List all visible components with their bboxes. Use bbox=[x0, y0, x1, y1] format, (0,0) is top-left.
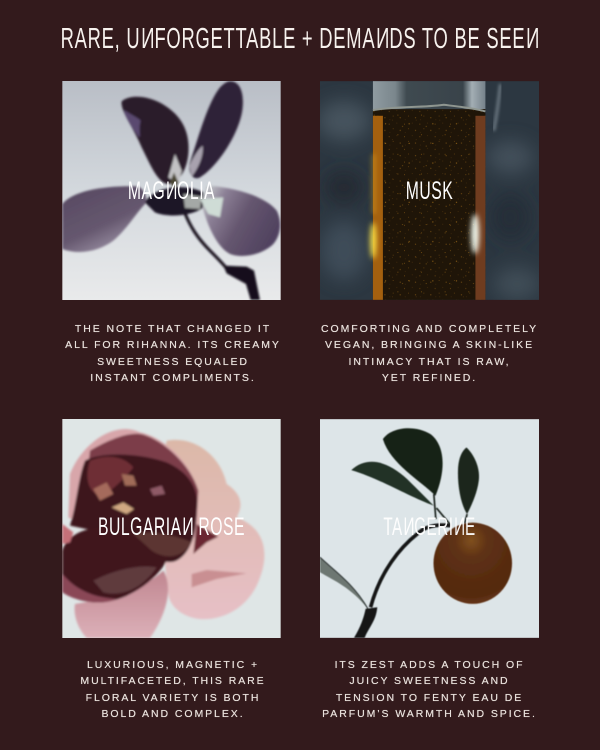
label: tangerine: TA GERI E bbox=[383, 513, 476, 541]
description: magnolia: INSTANT COMPLIMENTS. bbox=[90, 372, 256, 384]
photo: bulgarian rose bbox=[62, 419, 281, 638]
panel: musk bbox=[320, 81, 539, 384]
description: tangerine: ITS ZEST ADDS A TOUCH OF bbox=[335, 659, 524, 671]
title: N bbox=[525, 23, 539, 55]
description: musk: YET REFINED. bbox=[382, 372, 477, 384]
photo: tangerine branch bbox=[320, 419, 539, 638]
panel: bulgarian rose bbox=[62, 419, 281, 720]
description: bulgarian rose: FLORAL VARIETY IS BOTH bbox=[86, 692, 260, 704]
description: musk: VEGAN, BRINGING A SKIN-LIKE bbox=[325, 339, 534, 351]
label: magnolia: N bbox=[165, 177, 177, 205]
description: bulgarian rose: LUXURIOUS, MAGNETIC + bbox=[87, 659, 259, 671]
description: tangerine: TENSION TO FENTY EAU DE bbox=[336, 692, 523, 704]
description: tangerine: JUICY SWEETNESS AND bbox=[349, 675, 510, 687]
label: magnolia: MAG OLIA bbox=[128, 177, 215, 205]
description: magnolia bbox=[65, 323, 281, 384]
description: magnolia: SWEETNESS EQUALED bbox=[97, 356, 249, 368]
description: musk: INTIMACY THAT IS RAW, bbox=[349, 356, 510, 368]
description: magnolia: ALL FOR RIHANNA. ITS CREAMY bbox=[65, 339, 281, 351]
description: tangerine bbox=[322, 659, 537, 720]
description: musk bbox=[321, 323, 538, 384]
label: bulgarian rose: BULGARIA ROSE bbox=[98, 513, 245, 541]
panel: magnolia bbox=[62, 81, 281, 384]
title: N bbox=[375, 23, 389, 55]
label: tangerine: N bbox=[403, 513, 414, 541]
title: N bbox=[140, 23, 154, 55]
description: musk: COMFORTING AND COMPLETELY bbox=[321, 323, 538, 335]
photo: amber liquid in glass tube bbox=[320, 81, 539, 300]
description: bulgarian rose: BOLD AND COMPLEX. bbox=[101, 708, 245, 720]
title: RARE, U FORGETTABLE + DEMA DS TO BE SEE bbox=[61, 23, 525, 55]
label: musk: MUSK bbox=[406, 177, 453, 205]
description: tangerine: PARFUM’S WARMTH AND SPICE. bbox=[322, 708, 537, 720]
description: bulgarian rose: MULTIFACETED, THIS RARE bbox=[80, 675, 266, 687]
panel: tangerine bbox=[320, 419, 539, 720]
description: magnolia: THE NOTE THAT CHANGED IT bbox=[75, 323, 271, 335]
label: bulgarian rose: N bbox=[182, 513, 194, 541]
label: tangerine: N bbox=[453, 513, 465, 541]
description: bulgarian rose bbox=[80, 659, 266, 720]
photo: magnolia flower bbox=[62, 81, 281, 300]
